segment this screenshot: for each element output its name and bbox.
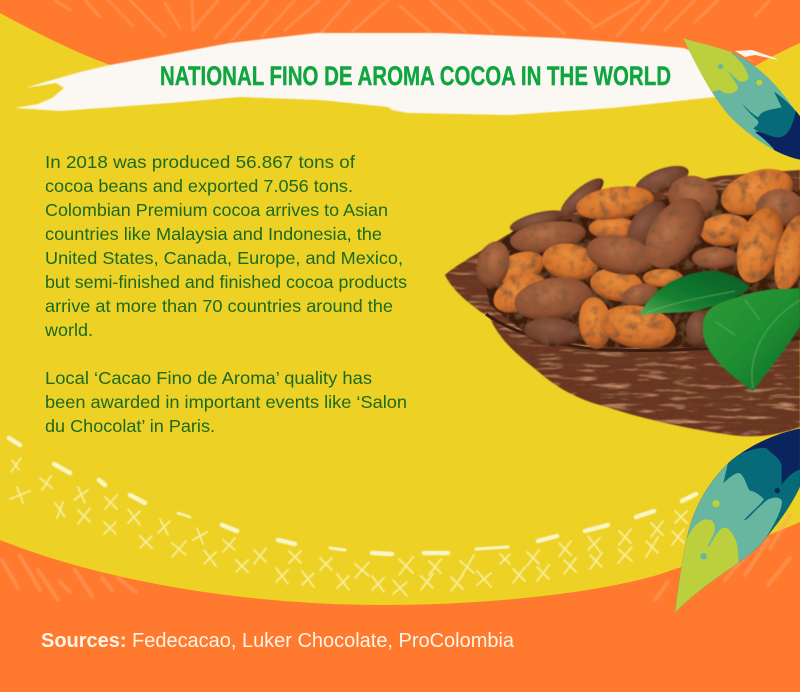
body text: United States, Canada, Europe, and Mexico, — [45, 248, 403, 268]
white brush stroke banner — [15, 33, 724, 115]
icon: bottom painted leaf — [675, 428, 800, 612]
cocoa beans — [471, 160, 800, 354]
decorative cross-stitch pattern — [9, 438, 696, 596]
green leaves — [640, 271, 800, 391]
cacao pod husk — [445, 170, 800, 437]
body text: Colombian Premium cocoa arrives to Asian — [45, 200, 388, 220]
body text: Local ‘Cacao Fino de Aroma’ quality has — [45, 368, 372, 388]
body text: In 2018 was produced 56.867 tons of — [45, 152, 355, 172]
icon: white paint splash near top leaf — [735, 50, 778, 64]
body text: arrive at more than 70 countries around the — [45, 296, 393, 316]
body text: du Chocolat’ in Paris. — [45, 416, 215, 436]
body text: but semi-finished and finished cocoa products — [45, 272, 407, 292]
body text: countries like Malaysia and Indonesia, the — [45, 224, 382, 244]
icon: top painted leaf — [684, 38, 800, 160]
sources footer: Sources: Fedecacao, Luker Chocolate, ProColombia — [41, 630, 515, 652]
photo: cacao pod husk filled with beans and leaves — [445, 160, 800, 437]
bottom orange band with hatched pattern — [0, 515, 800, 692]
body text — [44, 152, 407, 436]
body text: been awarded in important events like ‘Salon — [45, 392, 407, 412]
body text: cocoa beans and exported 7.056 tons. — [45, 176, 353, 196]
body text: world. — [44, 320, 93, 340]
top orange band with hatched pattern — [0, 0, 800, 96]
